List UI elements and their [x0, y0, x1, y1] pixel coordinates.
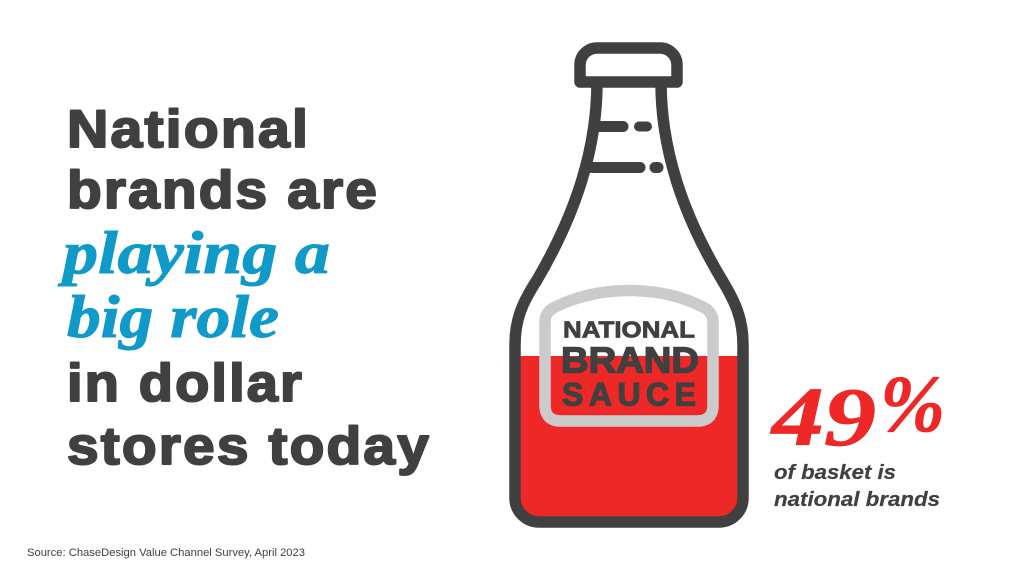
callout: 49 percent: national brands — [774, 488, 940, 511]
label text: BRAND — [561, 340, 699, 380]
callout: 49 percent: % — [880, 361, 945, 449]
callout: 49 percent — [770, 361, 945, 511]
label frame — [545, 290, 713, 421]
headline: big role — [67, 284, 279, 350]
label text: SAUCE — [562, 376, 696, 412]
bottle cap — [580, 48, 677, 82]
label text — [561, 316, 699, 412]
sauce fill — [515, 356, 743, 522]
bottle outline — [515, 82, 743, 522]
label text: NATIONAL — [563, 316, 695, 342]
headline: National — [67, 100, 310, 159]
headline — [57, 100, 431, 476]
headline: playing a — [57, 220, 330, 286]
neck highlight marks — [592, 126, 658, 168]
headline: in dollar — [67, 354, 304, 413]
icon: sauce bottle — [515, 48, 743, 522]
callout: 49 percent: 49 — [770, 371, 876, 464]
headline: stores today — [67, 417, 431, 476]
callout: 49 percent: of basket is — [774, 461, 896, 484]
source note: Source: ChaseDesign Value Channel Survey, April 2023 — [27, 547, 305, 559]
headline: brands are — [67, 161, 379, 220]
